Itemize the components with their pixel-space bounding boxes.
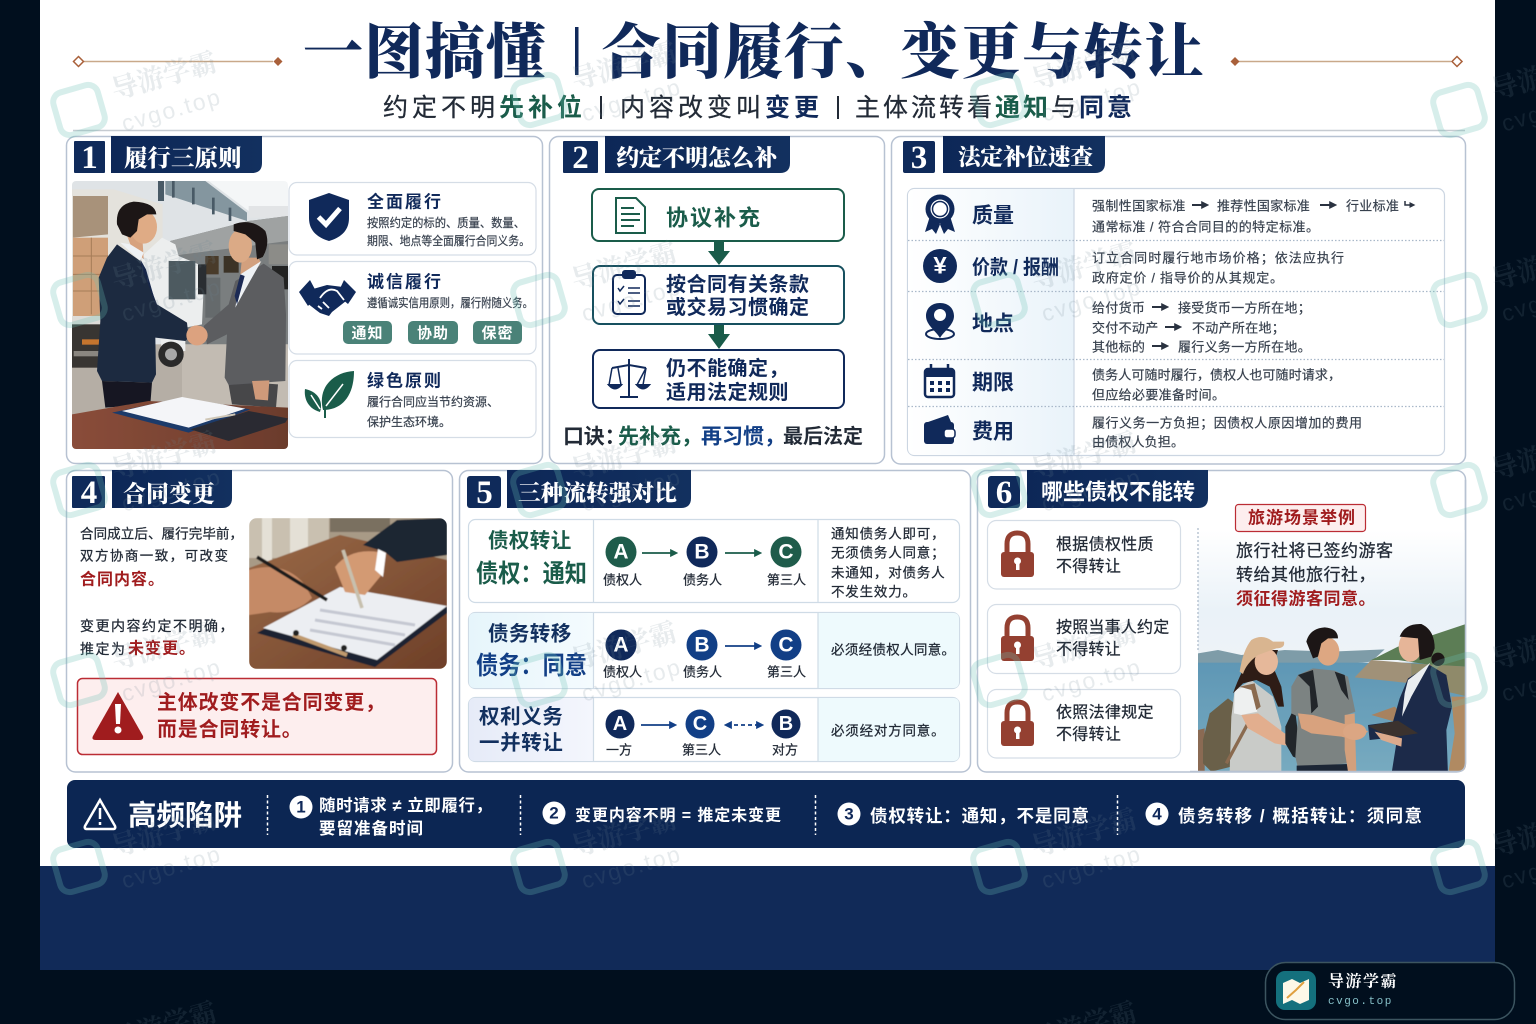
trap 4: 债务转移 / 概括转让：须同意 [1178, 806, 1422, 826]
photo: signing contract [249, 518, 447, 669]
scenario text: 旅行社将已签约游客 [1236, 542, 1394, 560]
row: 期限: 期限 [972, 372, 1014, 394]
heading 3: 3 [911, 140, 927, 176]
card: 绿色原则: 履行合同应当节约资源、 [367, 394, 499, 409]
row: 费用 [924, 415, 1362, 450]
watermark layer: cvgo.top [118, 653, 225, 706]
decorative rule right [1230, 56, 1462, 66]
flow diagram A to C, C with B: C [693, 713, 707, 735]
title: 变更与转让 [900, 5, 1205, 91]
card: 诚信履行: 诚信履行 [367, 272, 443, 292]
photo: travel agency scene [1198, 530, 1468, 776]
watermark layer: 导游学霸 [568, 617, 680, 675]
watermark layer: 导游学霸 [568, 427, 680, 485]
panel 2: 约定不明怎么补 [550, 136, 884, 464]
row: 权利义务一并转让: 一并转让 [479, 732, 563, 754]
tag: 保密: 保密 [481, 324, 514, 342]
scenario text: 转给其他旅行社， [1236, 566, 1376, 584]
text block: 变更内容约定不明确， [80, 618, 235, 634]
trap 2: 2 [549, 804, 559, 822]
step: 按合同有关条款: 或交易习惯确定 [666, 295, 810, 319]
callout: warning: 主体改变不是合同变更， [157, 690, 386, 714]
row: 质量: 通常标准 / 符合合同目的的特定标准。 [1092, 220, 1319, 234]
card: 诚信履行: 遵循诚实信用原则，履行附随义务。 [367, 295, 533, 310]
row: 地点: 履行义务一方所在地。 [1178, 340, 1311, 354]
heading 3 [903, 136, 1105, 176]
flow diagram A to C, C with B: 一方 [606, 742, 632, 758]
row: 费用: 履行义务一方负担；因债权人原因增加的费用 [1092, 416, 1362, 432]
tag: 旅游场景举例: 旅游场景举例 [1248, 508, 1356, 528]
step: 适用法定规则: 适用法定规则 [666, 380, 789, 404]
mnemonic: 口诀： [563, 426, 625, 448]
row: 质量: 强制性国家标准 [1092, 198, 1186, 214]
subtitle: 主体流转看 [855, 94, 995, 122]
brand badge: cvgo.top [1328, 996, 1393, 1008]
step: 按合同有关条款: 按合同有关条款 [666, 273, 810, 296]
card: 按照当事人约定: 不得转让 [1056, 640, 1121, 658]
flow diagram A to C, C with B: 第三人 [682, 742, 721, 758]
watermark layer: cvgo.top [578, 840, 685, 893]
watermark layer: 导游学霸 [108, 617, 220, 675]
card: 根据债权性质: 根据债权性质 [1056, 536, 1154, 554]
watermark layer: cvgo.top [118, 273, 225, 326]
row: 期限: 债务人可随时履行，债权人也可随时请求， [1092, 368, 1341, 382]
flow diagram A to B to C: A [613, 540, 629, 564]
step: 适用法定规则 [593, 350, 844, 408]
callout: warning: 而是合同转让。 [157, 718, 303, 741]
title: 合同履行、 [601, 5, 906, 91]
icon: shield [309, 193, 349, 241]
row: 地点 [926, 300, 1311, 354]
row: 质量: 行业标准 [1346, 198, 1399, 214]
callout: warning [78, 678, 436, 754]
panel 3: 法定补位速查 [892, 136, 1466, 464]
icon: lock [1001, 617, 1034, 661]
heading 5: 5 [476, 475, 493, 511]
watermark layer: cvgo.top [1038, 463, 1145, 516]
heading 1: 履行三原则 [124, 139, 242, 173]
row: 价款/报酬: 订立合同时履行地市场价格；依法应执行 [1092, 250, 1344, 266]
panel 1: 履行三原则 [66, 136, 542, 464]
flow diagram B to C: A [613, 634, 629, 656]
watermark layer: 导游学霸 [108, 427, 220, 485]
tag: 协助: 协助 [417, 325, 449, 342]
row: 质量: 推荐性国家标准 [1217, 198, 1310, 214]
icon: leaf [305, 371, 354, 418]
watermark layer: cvgo.top [1038, 73, 1145, 126]
mnemonic [563, 424, 863, 448]
flow diagram B to C: 债务人 [683, 664, 722, 680]
decorative rule left [74, 56, 282, 66]
watermark layer: 导游学霸 [108, 237, 220, 295]
row: 质量 [925, 194, 1413, 234]
row: 费用: 由债权人负担。 [1092, 434, 1184, 450]
arrow [708, 242, 730, 265]
card: 依照法律规定: 依照法律规定 [1056, 704, 1154, 722]
heading 1: 1 [81, 140, 98, 176]
watermark layer: cvgo.top [118, 83, 225, 136]
watermark layer: cvgo.top [1038, 273, 1145, 326]
watermark layer: 导游学霸 [1028, 427, 1140, 485]
heading 5: 三种流转强对比 [518, 476, 677, 508]
watermark layer: cvgo.top [578, 463, 685, 516]
row: 价款/报酬 [923, 249, 1344, 286]
row: 债务转移: 必须经债权人同意。 [831, 642, 955, 658]
mnemonic: 先补充， [618, 426, 702, 448]
watermark layer: cvgo.top [118, 463, 225, 516]
heading 2: 约定不明怎么补 [616, 140, 779, 172]
photo: handshake at truck [72, 181, 288, 449]
row: 债务转移: 债务转移 [488, 622, 572, 646]
subtitle: 先补位 [499, 93, 586, 122]
row: 债权转让: 未通知，对债务人 [831, 564, 945, 580]
row: 权利义务一并转让 [468, 698, 960, 762]
watermark layer: cvgo.top [578, 73, 685, 126]
tag: 保密 [473, 321, 522, 344]
scenario text: 须征得游客同意。 [1236, 588, 1376, 608]
icon: yuan [923, 249, 957, 283]
row: 权利义务一并转让: 权利义务 [479, 706, 563, 728]
row: 债权转让: 不发生效力。 [831, 584, 917, 600]
icon: lock [1001, 533, 1034, 577]
icon: lock [1001, 702, 1034, 746]
flow diagram A to B to C: 债权人 [603, 572, 642, 588]
watermark layer: 导游学霸 [568, 237, 680, 295]
card: 全面履行: 期限、地点等全面履行合同义务。 [367, 233, 530, 248]
flow diagram A to B to C: 第三人 [767, 572, 806, 588]
watermark layer: 导游学霸 [568, 804, 680, 862]
watermark layer: cvgo.top [1038, 840, 1145, 893]
arrow [708, 325, 730, 349]
heading 3: 法定补位速查 [958, 140, 1093, 172]
trap 1 [290, 795, 492, 838]
step: 协议补充: 协议补充 [666, 206, 762, 230]
icon: handshake [299, 280, 356, 316]
trap 2: 变更内容不明 = 推定未变更 [575, 806, 781, 824]
title [303, 5, 1205, 91]
trap 1: 随时请求 ≠ 立即履行， [319, 795, 492, 815]
heading 2 [563, 136, 790, 176]
trap 4: 4 [1152, 804, 1162, 824]
heading 2: 2 [572, 140, 589, 176]
row: 价款/报酬: 价款 / 报酬 [972, 256, 1059, 279]
watermark layer: cvgo.top [578, 653, 685, 706]
flow diagram B to C: C [778, 634, 794, 656]
row: 债权转让: 债权：通知 [476, 560, 587, 588]
text block [80, 526, 243, 658]
heading 4: 4 [81, 475, 97, 511]
text block: 合同内容。 [80, 570, 165, 588]
row: 费用: 费用 [972, 420, 1014, 444]
heading 6: 哪些债权不能转 [1041, 480, 1195, 504]
step: 适用法定规则: 仍不能确定， [666, 356, 789, 380]
flow diagram A to B to C: B [694, 540, 710, 564]
card: 依照法律规定 [988, 690, 1180, 758]
text block: 推定为 [80, 641, 126, 657]
card: 绿色原则: 保护生态环境。 [367, 414, 451, 429]
trap 2 [542, 802, 781, 824]
subtitle: 通知 [995, 94, 1051, 122]
flow diagram A to B to C [603, 536, 806, 588]
flow diagram B to C: B [694, 634, 710, 656]
title: 一图搞懂 [303, 5, 547, 91]
watermark layer: 导游学霸 [1028, 237, 1140, 295]
text block: 双方协商一致，可改变 [80, 548, 228, 564]
flow diagram B to C: 第三人 [767, 664, 806, 680]
flow diagram A to C, C with B: B [779, 713, 793, 735]
watermark layer: cvgo.top [118, 840, 225, 893]
watermark layer: 导游学霸 [108, 804, 220, 862]
flow diagram A to C, C with B [606, 710, 800, 758]
watermark layer: 导游学霸 [1028, 37, 1140, 95]
icon: map logo [1276, 971, 1316, 1010]
scenario text [1236, 542, 1394, 608]
step: 按合同有关条款 [593, 266, 844, 324]
subtitle [383, 93, 1135, 122]
row: 地点: 其他标的 [1092, 340, 1145, 354]
row: 债权转让: 无须债务人同意； [831, 544, 945, 562]
row: 权利义务一并转让: 必须经对方同意。 [831, 722, 945, 738]
card: 绿色原则 [289, 360, 536, 438]
text block: 合同成立后、履行完毕前， [80, 526, 243, 542]
icon: warning triangle [92, 692, 143, 740]
flow diagram B to C [603, 630, 806, 680]
panel 6: 哪些债权不能转 [978, 470, 1468, 776]
row: 地点: 交付不动产 [1092, 320, 1159, 336]
row: 质量: 质量 [972, 204, 1014, 228]
row: 地点: 地点 [972, 312, 1014, 336]
subtitle: 内容改变叫 [620, 94, 765, 122]
icon: rosette [925, 194, 955, 234]
row: 债权转让: 通知债务人即可， [831, 526, 945, 542]
subtitle: 与 [1051, 94, 1076, 122]
heading 5 [467, 470, 691, 511]
row: 债权转让: 债权转让 [488, 528, 572, 552]
brand badge: 导游学霸 [1328, 972, 1398, 990]
icon: yuan: ¥ [933, 252, 947, 280]
icon: pin [926, 303, 954, 339]
card: 诚信履行 [289, 262, 536, 354]
icon: wallet [924, 415, 955, 444]
subtitle: 约定不明 [383, 94, 499, 122]
subtitle: 同意 [1079, 93, 1135, 122]
row: 价款/报酬: 政府定价 / 指导价的从其规定。 [1092, 270, 1283, 286]
row: 期限: 但应给必要准备时间。 [1092, 388, 1225, 402]
watermark layer: 导游学霸 [1028, 617, 1140, 675]
icon: calendar [925, 364, 954, 397]
watermark layer: cvgo.top [1038, 653, 1145, 706]
card: 按照当事人约定 [988, 604, 1180, 674]
card: 根据债权性质 [988, 520, 1180, 589]
flow diagram A to C, C with B: 对方 [772, 742, 798, 758]
card: 依照法律规定: 不得转让 [1056, 726, 1121, 744]
panel 4: 合同变更 [66, 470, 452, 772]
heading 6: 6 [996, 475, 1012, 511]
row: 债权转让 [468, 520, 960, 602]
heading 4 [72, 470, 232, 511]
flow diagram A to B to C: C [778, 540, 794, 564]
icon: scales [609, 359, 649, 397]
trap 3: 债权转让：通知，不是同意 [870, 806, 1089, 826]
card: 绿色原则: 绿色原则 [367, 370, 443, 390]
panel 5: 三种流转强对比 [460, 470, 970, 772]
heading 4: 合同变更 [123, 476, 215, 508]
card: 全面履行: 全面履行 [367, 192, 443, 212]
watermark layer: 导游学霸 [1028, 804, 1140, 862]
heading 1 [74, 136, 262, 176]
mnemonic: 再习惯， [701, 426, 785, 448]
trap 1: 要留准备时间 [319, 818, 424, 838]
tag: 协助 [408, 321, 458, 344]
tag: 通知 [343, 321, 392, 344]
trap 1: 1 [296, 798, 306, 816]
icon: warning outline [85, 800, 115, 829]
card: 根据债权性质: 不得转让 [1056, 558, 1121, 576]
tag: 旅游场景举例 [1236, 504, 1366, 532]
subtitle: 变更 [765, 94, 823, 122]
mnemonic: 最后法定 [783, 424, 863, 448]
watermark layer: 导游学霸 [568, 37, 680, 95]
tag: 通知: 通知 [351, 324, 384, 342]
trap 3: 3 [844, 804, 854, 824]
icon: checklist [613, 271, 645, 314]
card: 全面履行 [289, 182, 536, 255]
watermark layer: cvgo.top [578, 273, 685, 326]
quick reference table [908, 188, 1444, 456]
row: 地点: 给付货币 [1092, 300, 1145, 316]
row: 地点: 不动产所在地； [1192, 320, 1285, 336]
row: 债务转移 [468, 612, 960, 688]
heading 6 [988, 470, 1208, 511]
banner: 高频陷阱: 高频陷阱 [128, 800, 242, 832]
flow diagram B to C: 债权人 [603, 664, 642, 680]
row: 期限 [925, 364, 1341, 402]
watermark layer: 导游学霸 [108, 47, 220, 105]
row: 地点: 接受货币一方所在地； [1178, 300, 1311, 316]
card: 按照当事人约定: 按照当事人约定 [1056, 618, 1169, 636]
flow diagram A to B to C: 债务人 [683, 572, 722, 588]
icon: document [616, 198, 645, 233]
step: 协议补充 [592, 189, 844, 241]
banner: 高频陷阱 [67, 780, 1465, 848]
brand badge [1266, 962, 1514, 1020]
card: 全面履行: 按照约定的标的、质量、数量、 [367, 215, 525, 230]
text block: 未变更。 [128, 638, 196, 658]
flow diagram A to C, C with B: A [613, 713, 627, 735]
row: 债务转移: 债务：同意 [476, 651, 587, 680]
